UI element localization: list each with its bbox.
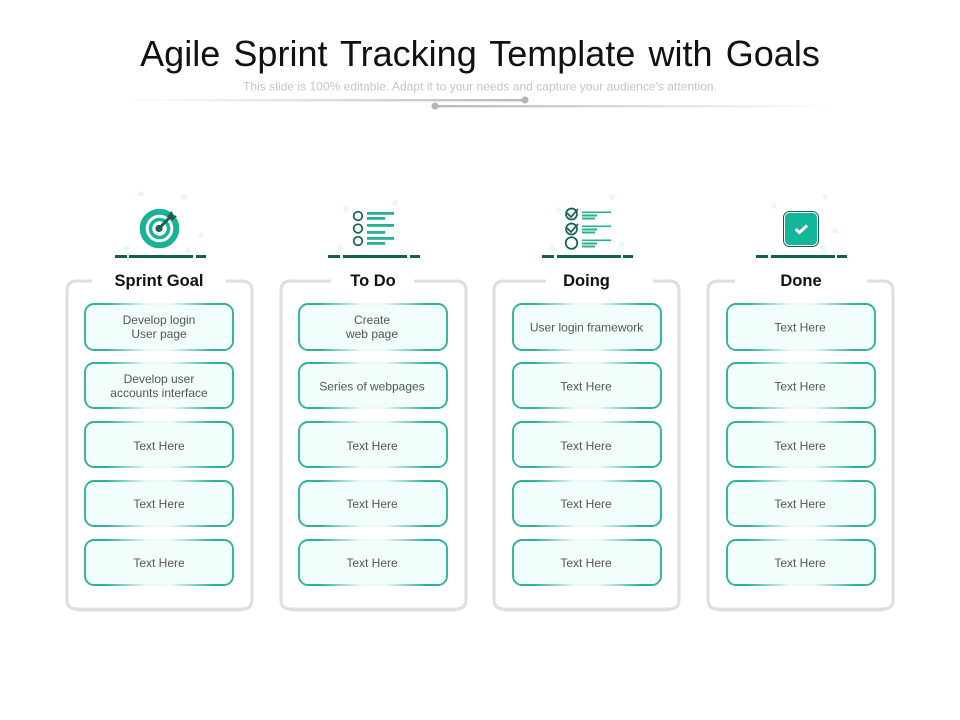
card 4: Text Here	[560, 497, 612, 511]
card 2: Text Here	[774, 380, 826, 394]
card 3: Text Here	[774, 439, 826, 453]
icon underline	[756, 255, 847, 258]
card 5	[513, 540, 661, 585]
icon: to do list	[337, 200, 406, 255]
icon underline	[115, 255, 206, 258]
card 5: Text Here	[346, 556, 398, 570]
column: Done	[708, 194, 893, 610]
column: To Do	[281, 200, 466, 610]
card 2	[85, 363, 233, 408]
column: Sprint Goal	[67, 191, 252, 610]
card 2: Text Here	[560, 380, 612, 394]
icon: checklist	[549, 194, 624, 251]
heading: Doing	[563, 272, 610, 290]
card 2	[727, 363, 875, 408]
card 3: Text Here	[346, 439, 398, 453]
card 1: User login framework	[530, 320, 644, 334]
card 4: Text Here	[346, 497, 398, 511]
panel outline	[494, 281, 679, 610]
heading: Done	[780, 272, 822, 290]
card 1: web page	[345, 327, 398, 341]
card 1	[85, 304, 233, 350]
heading: Sprint Goal	[115, 272, 203, 290]
card 4: Text Here	[774, 497, 826, 511]
card 1: Create	[354, 313, 390, 327]
card 3: Text Here	[133, 439, 185, 453]
card 4	[299, 481, 447, 526]
title divider	[125, 96, 835, 110]
card 5: Text Here	[774, 556, 826, 570]
icon underline	[328, 255, 420, 258]
card 4	[85, 481, 233, 526]
card 3	[85, 422, 233, 467]
heading: To Do	[350, 272, 396, 290]
icon: target with arrow	[124, 191, 204, 254]
card 4: Text Here	[133, 497, 185, 511]
card 3	[513, 422, 661, 467]
card 3: Text Here	[560, 439, 612, 453]
column: Doing	[494, 194, 679, 610]
card 3	[299, 422, 447, 467]
card 2: accounts interface	[110, 386, 208, 400]
icon: checked box	[771, 194, 838, 251]
card 1	[727, 304, 875, 350]
panel outline	[708, 281, 893, 610]
card 1	[299, 304, 447, 350]
card 2: Series of webpages	[319, 380, 425, 394]
card 2	[299, 363, 447, 408]
title: Agile Sprint Tracking Template with Goals	[140, 33, 820, 74]
subtitle: This slide is 100% editable. Adapt it to your needs and capture your audience's attention.	[243, 80, 717, 94]
card 1	[513, 304, 661, 350]
card 1: Develop login	[123, 313, 195, 327]
card 5	[727, 540, 875, 585]
card 2	[513, 363, 661, 408]
card 4	[513, 481, 661, 526]
card 3	[727, 422, 875, 467]
panel outline	[281, 281, 466, 610]
icon underline	[542, 255, 633, 258]
card 1: User page	[131, 327, 187, 341]
card 1: Text Here	[774, 320, 826, 334]
card 5	[85, 540, 233, 585]
card 4	[727, 481, 875, 526]
card 5: Text Here	[560, 556, 612, 570]
card 2: Develop user	[124, 372, 194, 386]
card 5: Text Here	[133, 556, 185, 570]
panel outline	[67, 281, 252, 610]
card 5	[299, 540, 447, 585]
